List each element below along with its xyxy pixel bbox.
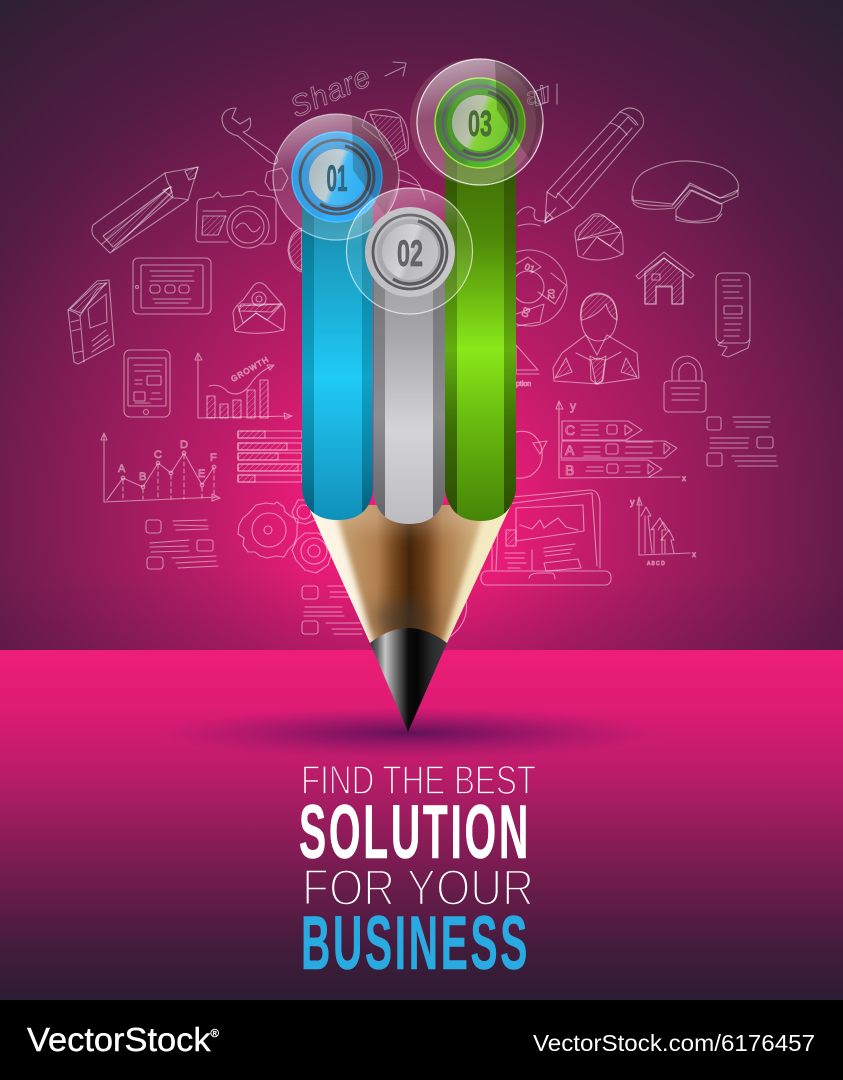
watermark logo text: ®: [211, 1028, 219, 1040]
watermark logo text: VectorStock: [27, 1021, 203, 1058]
pencil wood cone: [310, 505, 511, 643]
green pencil segment: [445, 125, 516, 525]
doodle: tablet: [133, 258, 211, 314]
doodle: circular arrow: [516, 431, 547, 478]
doodle: numbered donut: 03: [519, 306, 532, 319]
doodle: line chart: D: [180, 439, 188, 451]
doodle: growth chart: [195, 353, 292, 419]
doodle: right large pencil: [545, 108, 644, 223]
doodle: growth chart: GROWTH: [230, 355, 271, 384]
pencil: [300, 125, 518, 732]
doodle: wrench: [222, 108, 288, 190]
headline line: solution: SOLUTION: [299, 790, 531, 875]
doodle: envelope with at sign: [233, 283, 285, 333]
doodle: line chart: A: [118, 463, 126, 475]
doodle: text block right: [707, 417, 778, 466]
doodle: arrow ladder chart: A: [565, 442, 575, 458]
watermark image id: VectorStock.com/6176457: [533, 1030, 815, 1056]
badge 03: [410, 59, 543, 185]
badge 01: [273, 114, 399, 240]
doodle: arrow ladder chart: B: [565, 462, 574, 478]
doodle: gears: [238, 500, 332, 573]
doodle: line chart: [101, 433, 220, 502]
doodle: ruler triangle and caption: ption: [516, 381, 531, 388]
doodle: share heading and arrow: Share: [285, 60, 377, 124]
doodle: swirl and tag at top right of green bar: [517, 81, 557, 226]
doodle: laptop: [481, 490, 611, 585]
doodle: person bust: [553, 293, 639, 384]
doodle: upward arrows chart: x: [692, 550, 696, 559]
doodle: swirl and tag at top right of green bar: al: [524, 81, 548, 111]
doodle: small text block left: [146, 520, 218, 569]
wall background: [0, 0, 843, 651]
doodle: numbered donut: 02: [546, 289, 556, 299]
doodle: left pencil: [92, 167, 198, 253]
doodle: book: [68, 280, 114, 364]
doodle: house: [636, 252, 694, 304]
doodle: ruler triangle and caption: [516, 345, 539, 388]
headline: [299, 757, 536, 986]
doodle: phone: [124, 350, 170, 417]
doodle: text block under gears: [302, 586, 467, 640]
pencil shadow on floor: [155, 707, 665, 759]
number 03: 03: [468, 103, 492, 144]
headline line: business: BUSINESS: [301, 901, 530, 986]
doodle: numbered donut: 01: [523, 261, 536, 274]
doodle: pie chart: [632, 161, 738, 223]
headline line: find the best: FIND THE BEST: [301, 757, 536, 803]
doodle: line chart: B: [139, 471, 146, 483]
headline line: for your: FOR YOUR: [302, 859, 534, 916]
doodle: arrow ladder chart: y: [570, 399, 576, 413]
watermark bar: [0, 1000, 843, 1080]
doodle: phone speech bubble: [716, 273, 750, 357]
gray pencil segment: [374, 278, 445, 524]
doodle: envelope right: [575, 214, 623, 260]
doodle: upward arrows chart: A B C D: [647, 561, 665, 567]
doodle: numbered donut: [491, 250, 567, 326]
wall foot shade: [0, 570, 843, 651]
doodle: arrow ladder chart: [556, 399, 686, 483]
doodle: padlock: [664, 356, 706, 412]
floor: [0, 650, 843, 1000]
doodle: upward arrows chart: y: [630, 497, 635, 507]
doodle: arrow ladder chart: C: [565, 422, 575, 438]
doodle: arrow ladder chart: x: [682, 474, 686, 483]
doodle: line chart: E: [198, 468, 205, 480]
doodle: upward arrows chart: [630, 497, 696, 567]
doodle: camera: [196, 191, 276, 248]
blue pencil segment: [302, 175, 373, 525]
badge 02: [346, 188, 472, 314]
doodle: line chart: F: [210, 452, 217, 464]
number 01: 01: [326, 158, 348, 199]
doodle: line chart: C: [154, 449, 162, 461]
doodle: horizontal bars: [238, 431, 302, 482]
number 02: 02: [397, 233, 423, 274]
pencil lead tip: [370, 628, 447, 732]
doodle: apple shapes behind the buttons: [288, 110, 425, 272]
